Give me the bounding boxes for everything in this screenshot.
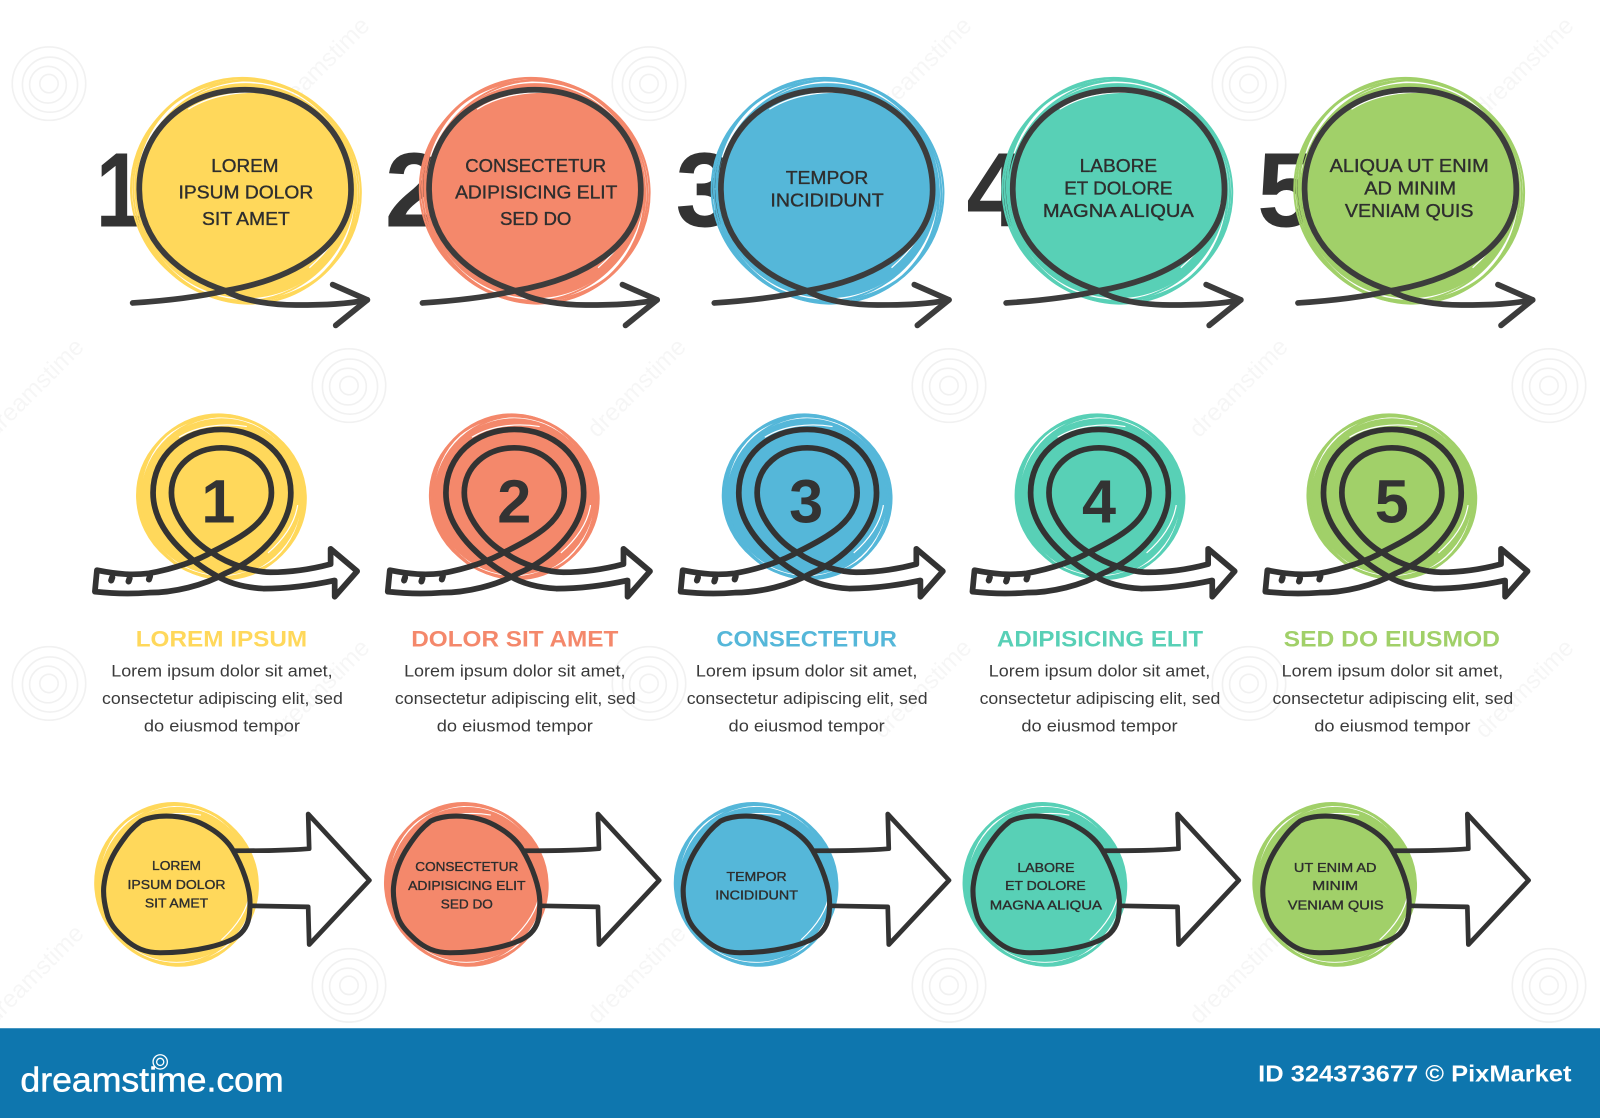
bottom step 4: ET DOLORE xyxy=(1005,878,1086,893)
item 4 description: Lorem ipsum dolor sit amet, xyxy=(989,662,1210,680)
watermark pattern: dreamstime xyxy=(1184,333,1294,443)
bottom step 2: SED DO xyxy=(441,897,493,912)
bottom step 5: MINIM xyxy=(1312,878,1358,893)
step 4 circle: MAGNA ALIQUA xyxy=(1043,200,1195,221)
watermark pattern: dreamstime xyxy=(1470,634,1579,744)
step 4 circle xyxy=(963,38,1272,344)
item 3 description: do eiusmod tempor xyxy=(729,717,885,735)
step 2 circle: ADIPISICING ELIT xyxy=(455,181,617,202)
item 5 description: do eiusmod tempor xyxy=(1314,717,1471,735)
item 5 ribbon xyxy=(1265,385,1528,608)
bottom step 1: SIT AMET xyxy=(145,896,208,911)
step 4 circle: ET DOLORE xyxy=(1064,177,1172,198)
item 2 heading: DOLOR SIT AMET xyxy=(411,627,619,652)
step 2 circle: CONSECTETUR xyxy=(465,155,606,176)
row 3: blobs with outlined arrows xyxy=(67,774,1529,995)
step 2 circle xyxy=(380,38,689,344)
step 3 circle xyxy=(672,38,983,344)
step 1 circle: 1 xyxy=(96,131,143,249)
bottom step 5: VENIAM QUIS xyxy=(1288,898,1384,913)
bottom step 2 xyxy=(357,774,659,995)
item 2 description: consectetur adipiscing elit, sed xyxy=(395,690,636,708)
item 3 heading: CONSECTETUR xyxy=(716,627,897,652)
step 1 circle xyxy=(91,38,400,344)
item 5 heading: SED DO EIUSMOD xyxy=(1284,627,1500,652)
item 1 description: Lorem ipsum dolor sit amet, xyxy=(111,662,333,680)
watermark pattern: dreamstime xyxy=(582,920,692,1029)
item 1 ribbon: 1 xyxy=(201,467,235,535)
bottom step 3 xyxy=(647,774,949,995)
item 1 heading: LOREM IPSUM xyxy=(136,627,307,652)
item 2 description: Lorem ipsum dolor sit amet, xyxy=(404,662,626,680)
footer bar xyxy=(0,1028,1600,1118)
watermark pattern: dreamstime xyxy=(1470,12,1579,122)
step 4 circle: LABORE xyxy=(1080,155,1157,176)
item 2 ribbon xyxy=(388,385,650,608)
item 4 ribbon xyxy=(972,385,1235,608)
step 5 circle: 5 xyxy=(1257,131,1316,249)
item 4 description: consectetur adipiscing elit, sed xyxy=(980,690,1220,708)
item 1 description: consectetur adipiscing elit, sed xyxy=(102,690,343,708)
bottom step 1 xyxy=(67,774,369,995)
item 3 description: Lorem ipsum dolor sit amet, xyxy=(696,662,917,680)
step 5 circle: AD MINIM xyxy=(1364,177,1456,198)
item 1 description xyxy=(102,662,343,735)
item 3 description xyxy=(687,662,928,735)
item 5 description: Lorem ipsum dolor sit amet, xyxy=(1282,662,1503,680)
item 4 ribbon: 4 xyxy=(1082,467,1116,535)
watermark pattern: dreamstime xyxy=(582,333,692,443)
step 5 circle xyxy=(1255,38,1564,344)
step 3 circle: 3 xyxy=(676,131,735,249)
bottom step 3: INCIDIDUNT xyxy=(715,887,798,902)
step 2 circle: SED DO xyxy=(500,208,571,229)
item 5 description xyxy=(1272,662,1513,735)
watermark pattern: dreamstime xyxy=(266,12,375,122)
bottom step 5 xyxy=(1225,774,1529,995)
item 2 ribbon: 2 xyxy=(497,467,531,535)
watermark pattern: dreamstime xyxy=(868,634,977,744)
step 2 circle: 2 xyxy=(385,131,444,249)
step 4 circle: 4 xyxy=(966,131,1025,249)
bottom step 2: CONSECTETUR xyxy=(415,859,518,874)
item 5 ribbon: 5 xyxy=(1375,467,1409,535)
item 1 description: do eiusmod tempor xyxy=(144,717,301,735)
step 3 circle: TEMPOR xyxy=(786,167,868,188)
item 3 description: consectetur adipiscing elit, sed xyxy=(687,690,928,708)
watermark pattern: dreamstime xyxy=(266,634,375,744)
watermark pattern: dreamstime xyxy=(868,12,977,122)
footer logo: dreamstime.com xyxy=(20,1061,284,1099)
item 5 description: consectetur adipiscing elit, sed xyxy=(1272,690,1513,708)
step 1 circle: IPSUM DOLOR xyxy=(179,181,313,202)
bottom step 4: LABORE xyxy=(1017,860,1075,875)
item 4 heading: ADIPISICING ELIT xyxy=(997,627,1203,652)
step 5 circle: ALIQUA UT ENIM xyxy=(1330,155,1489,176)
item 2 description: do eiusmod tempor xyxy=(437,717,593,735)
bottom step 1: LOREM xyxy=(152,858,201,873)
step 1 circle: LOREM xyxy=(211,155,279,176)
item 2 description xyxy=(395,662,636,735)
bottom step 5: UT ENIM AD xyxy=(1294,860,1377,875)
watermark pattern: dreamstime xyxy=(1184,920,1294,1029)
step 5 circle: VENIAM QUIS xyxy=(1345,200,1473,221)
bottom step 4 xyxy=(936,774,1239,995)
row 2: ribbon loops with headings and descriptions xyxy=(95,385,1528,735)
step 3 circle: INCIDIDUNT xyxy=(770,190,884,211)
item 3 ribbon: 3 xyxy=(789,467,823,535)
step 1 circle: SIT AMET xyxy=(202,208,290,229)
item 4 description: do eiusmod tempor xyxy=(1021,717,1178,735)
item 3 ribbon xyxy=(681,385,943,608)
item 1 ribbon xyxy=(95,385,357,608)
row 1: numbered circles with looped arrows xyxy=(91,38,1564,344)
bottom step 2: ADIPISICING ELIT xyxy=(408,878,526,893)
item 4 description xyxy=(980,662,1220,735)
bottom step 1: IPSUM DOLOR xyxy=(128,877,226,892)
image id credit: ID 324373677 © PixMarket xyxy=(1258,1060,1572,1086)
bottom step 3: TEMPOR xyxy=(727,869,787,884)
bottom step 4: MAGNA ALIQUA xyxy=(990,898,1102,913)
